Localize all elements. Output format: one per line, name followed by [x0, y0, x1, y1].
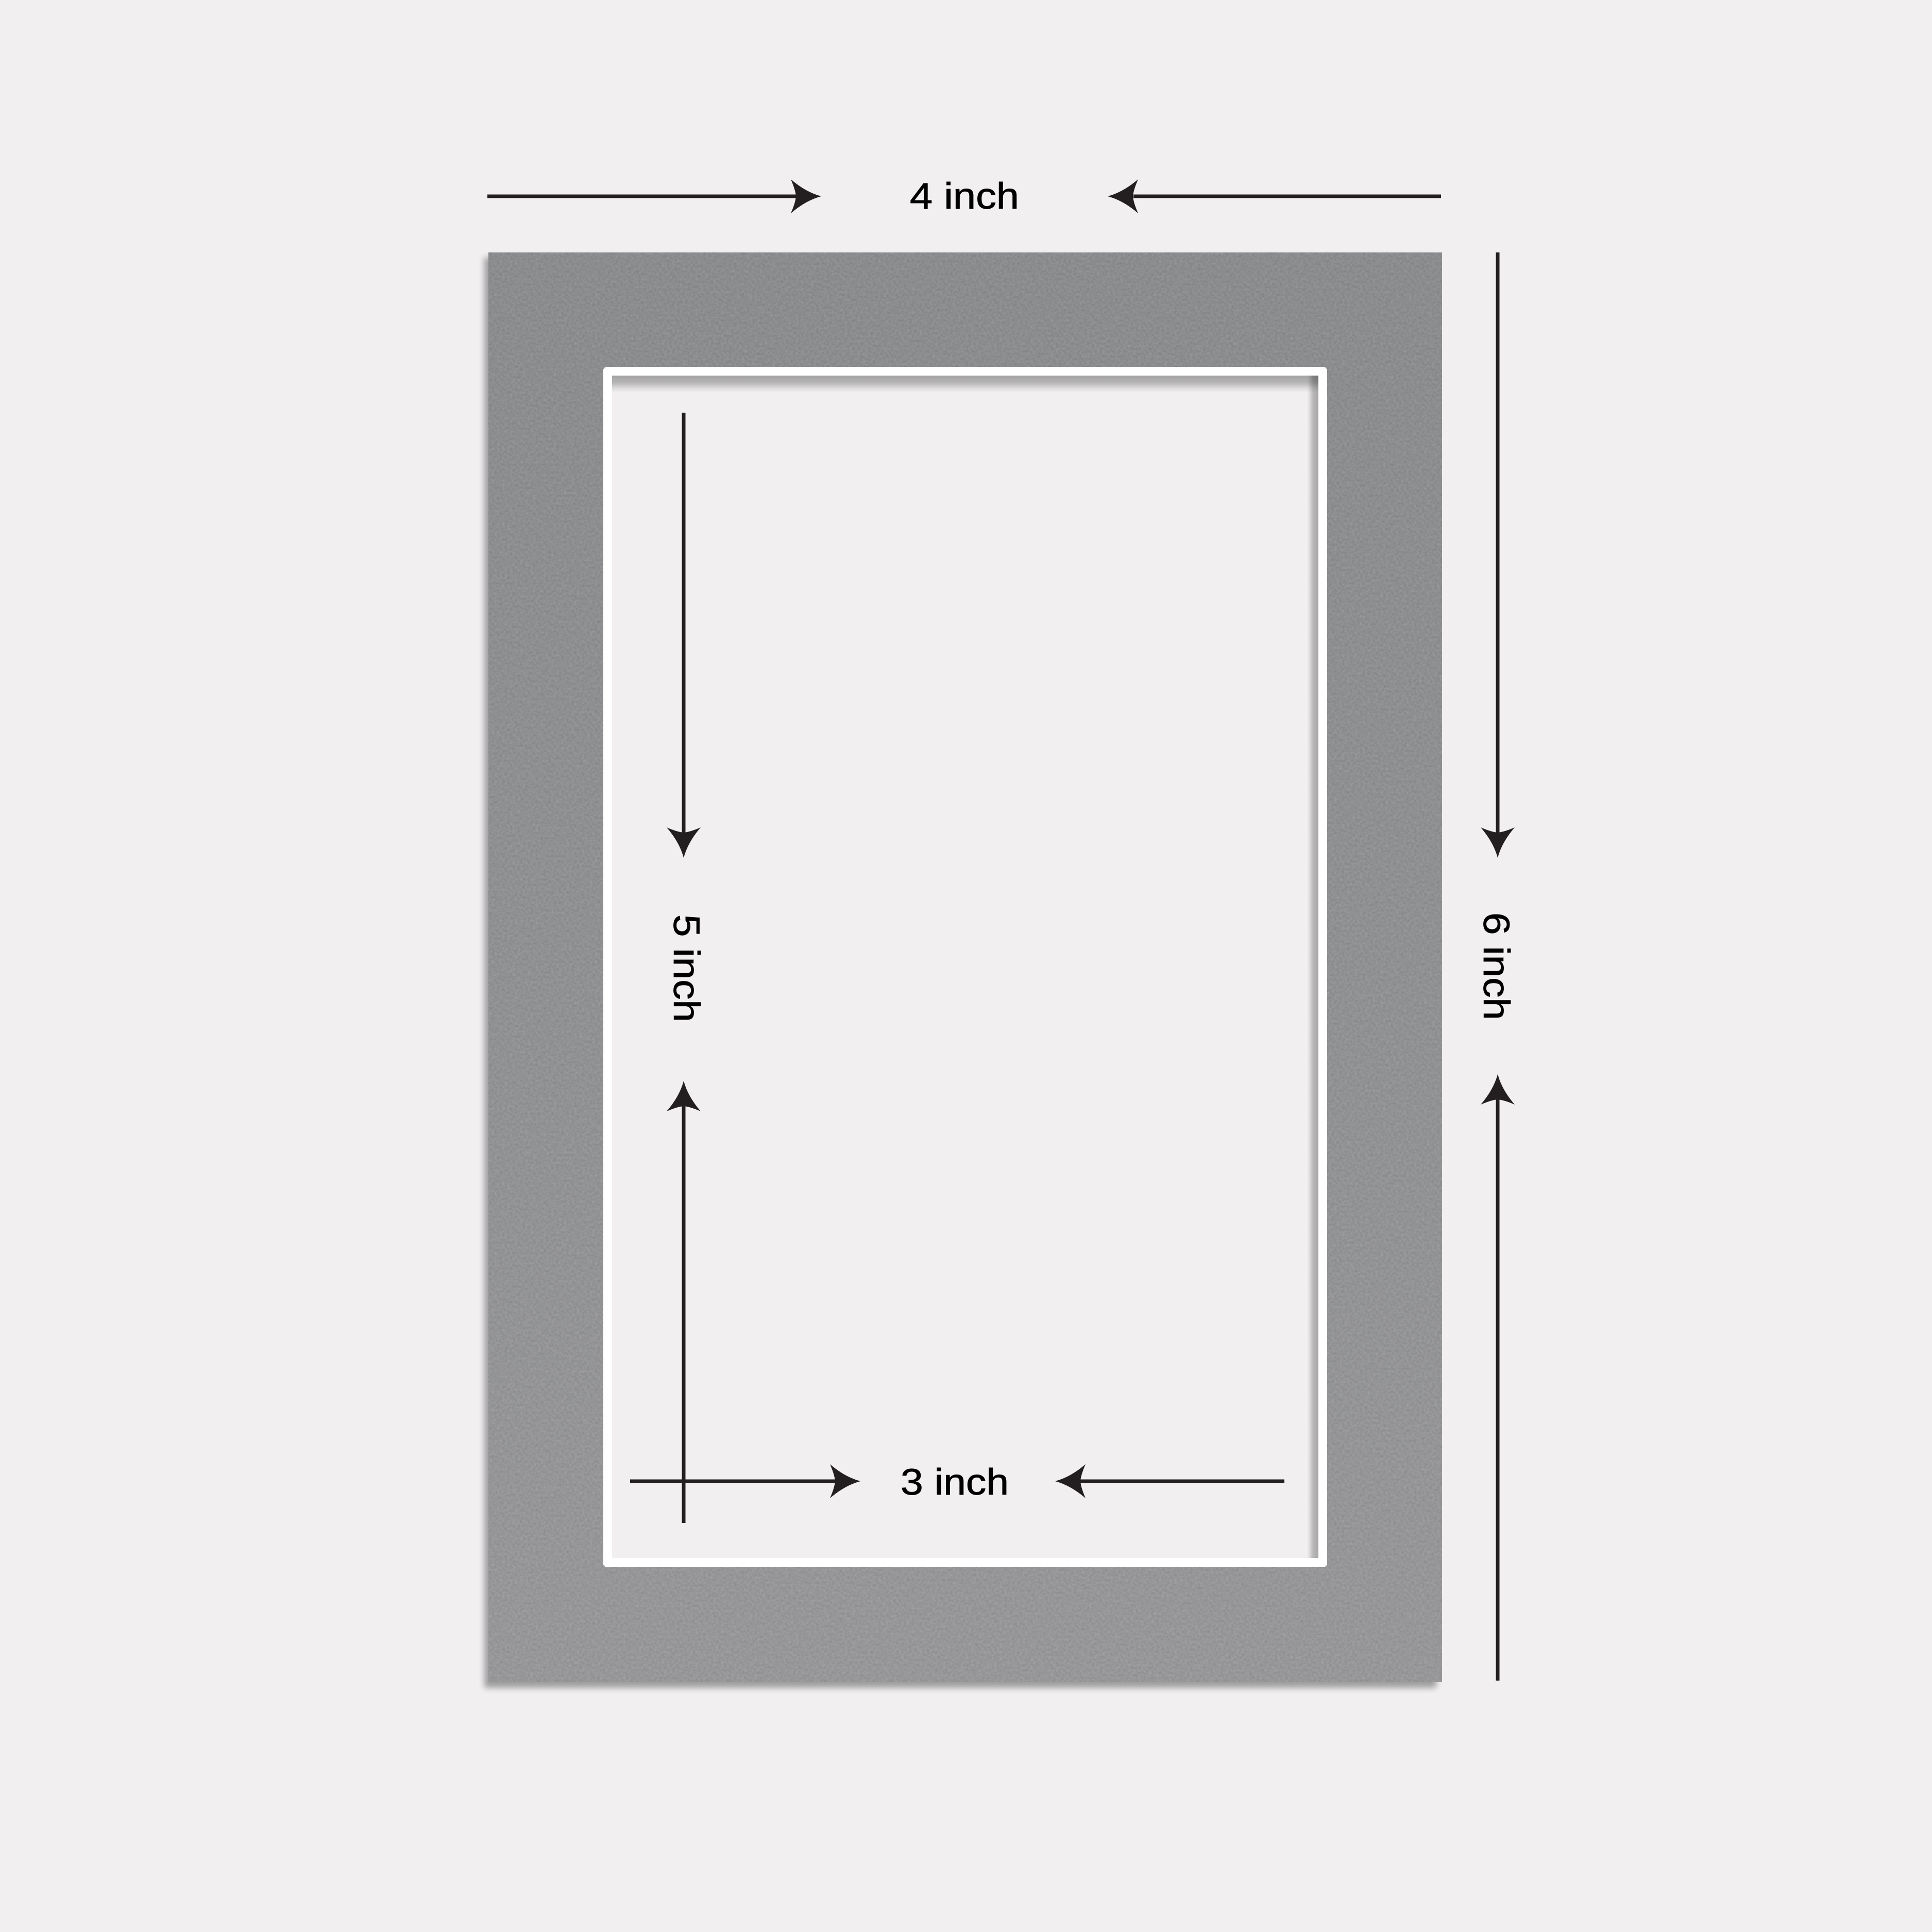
label: 3 inch: 3 inch: [901, 1462, 1009, 1503]
white bevel around window: [603, 367, 1327, 1567]
mat board surface: [488, 252, 1442, 1682]
label: 6 inch: 6 inch: [1476, 912, 1516, 1020]
arrow: top pointing down: [667, 413, 701, 858]
label: 4 inch: 4 inch: [910, 176, 1019, 217]
dimension: 3 inch window width: [630, 1462, 1284, 1503]
arrow: right pointing left: [1055, 1464, 1284, 1498]
arrow: left pointing right: [630, 1464, 860, 1498]
arrow: bottom pointing up: [667, 1081, 701, 1523]
diagram: photo mat with dimensions: [480, 179, 1515, 1692]
arrow: top pointing down: [1481, 252, 1515, 858]
dimension: 5 inch window height: [666, 413, 706, 1523]
arrow: right pointing left: [1108, 179, 1441, 213]
dimension: 4 inch outer width: [487, 176, 1441, 217]
mat paper grain: [488, 252, 1442, 1682]
arrow: left pointing right: [487, 179, 821, 213]
panel: gray mat board with window: [484, 252, 1442, 1688]
mat drop shadow: [484, 258, 1436, 1688]
window inner shadow: top: [612, 376, 1318, 393]
dimension: 6 inch outer height: [1476, 252, 1516, 1681]
label: 5 inch: 5 inch: [666, 914, 706, 1022]
arrow: bottom pointing up: [1481, 1074, 1515, 1681]
window opening: [612, 376, 1318, 1558]
window inner shadow: right: [1307, 376, 1318, 1558]
